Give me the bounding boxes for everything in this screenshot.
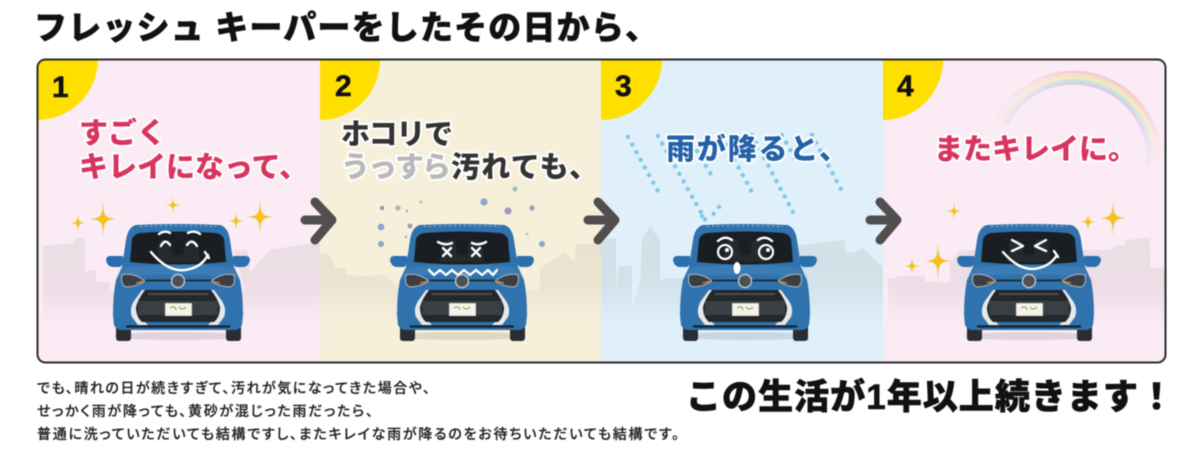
heading: step 2: うっすら: [341, 152, 451, 184]
dust particles: [378, 186, 545, 247]
heading: step 1: キレイになって、: [79, 152, 308, 184]
sparkles: step 1: [70, 195, 273, 240]
title: フレッシュ キーパーをしたその日から、: [34, 9, 658, 46]
heading: step 1: [79, 116, 308, 184]
panel 1: clean: 1: [52, 71, 69, 104]
panel 3: rain: [601, 59, 883, 363]
panel group: four steps: [37, 59, 1166, 363]
panel 1: clean: [37, 59, 320, 363]
panel frame: [38, 60, 1166, 362]
arrow 3: [870, 202, 897, 240]
heading: step 4: またキレイに。: [934, 134, 1137, 166]
heading: step 2: 汚れても、: [451, 151, 598, 184]
note text: 普通に洗っていただいても結構ですし、またキレイな雨が降るのをお待ちいただいても結構です。: [37, 426, 679, 442]
panel 2: dusty: 2: [335, 70, 352, 103]
note text: せっかく雨が降っても、黄砂が混じった雨だったら、: [37, 403, 373, 419]
arrow 2: [588, 202, 615, 240]
panel 3: rain: 3: [615, 70, 632, 103]
heading: step 2: [341, 119, 598, 184]
panel 4: clean again: 4: [897, 70, 914, 103]
car with wide-eyed face: [673, 224, 817, 341]
panel 2: dusty: [320, 59, 601, 363]
closing statement: この生活が1年以上続きます！: [686, 377, 1174, 417]
heading: step 2: ホコリで: [341, 119, 453, 151]
note text: [37, 380, 679, 442]
car with laughing face: [957, 224, 1101, 341]
heading: step 3: 雨が降ると、: [666, 132, 848, 166]
car with tired face: [390, 224, 534, 341]
rainbow: [997, 72, 1160, 165]
arrow 1: [305, 202, 332, 240]
car with smiling face: [106, 224, 250, 341]
panel 4: clean again: [883, 59, 1166, 363]
heading: step 1: すごく: [79, 116, 166, 150]
rain dots: [628, 135, 842, 223]
note text: でも、晴れの日が続きすぎて、汚れが気になってきた場合や、: [37, 380, 430, 396]
sparkles: step 4: [904, 198, 1126, 282]
